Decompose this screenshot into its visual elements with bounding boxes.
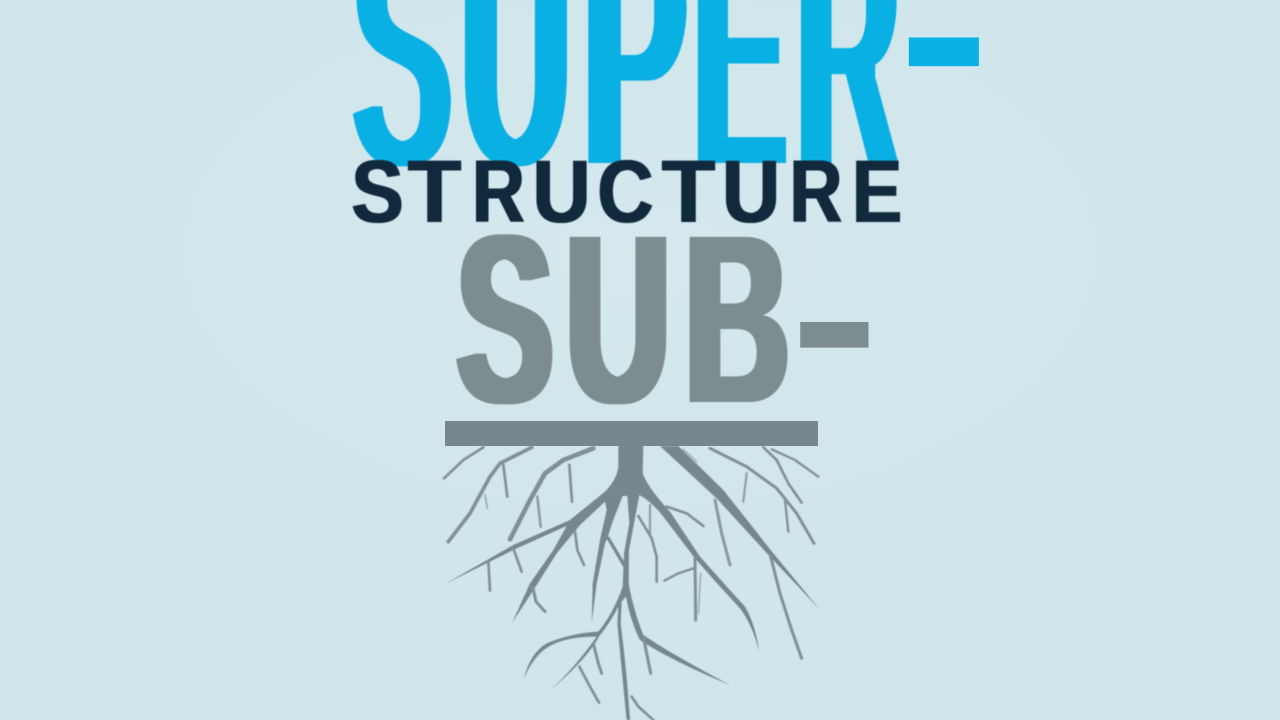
heading: SUB-	[457, 185, 879, 453]
heading: STRUCTURE: C	[598, 141, 653, 241]
icon: root system	[444, 445, 819, 720]
heading: SUB-: S	[457, 185, 553, 453]
heading: SUB-: U	[566, 185, 670, 453]
heading: STRUCTURE: U	[533, 141, 590, 241]
heading: STRUCTURE: R	[472, 142, 525, 242]
heading: STRUCTURE: U	[722, 141, 780, 241]
heading: STRUCTURE: T	[408, 141, 461, 241]
heading: SUB-: B	[685, 185, 789, 453]
heading: STRUCTURE: R	[790, 142, 842, 242]
heading: STRUCTURE: T	[662, 141, 715, 241]
heading: STRUCTURE: S	[351, 141, 404, 241]
ground line	[445, 421, 818, 446]
heading: STRUCTURE: E	[852, 143, 902, 241]
heading: SUPER-	[352, 0, 990, 242]
heading: SUB-: -	[790, 196, 879, 436]
heading: STRUCTURE	[351, 141, 902, 242]
